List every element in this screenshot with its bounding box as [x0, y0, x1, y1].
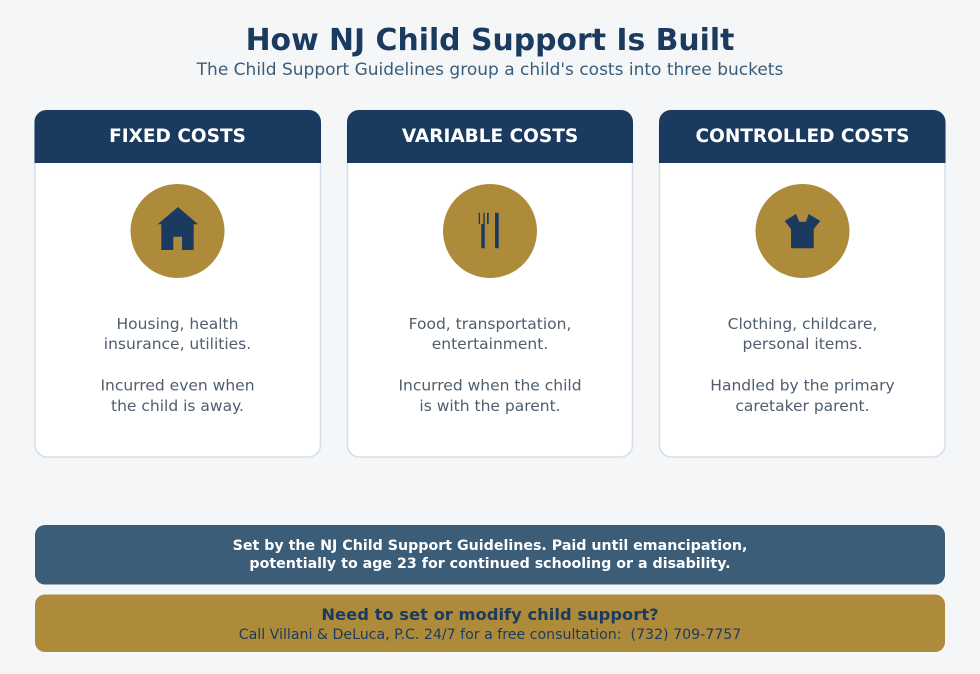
- title: How NJ Child Support Is Built: [246, 23, 734, 58]
- banner: guidelines note: Set by the NJ Child Support Guidelines. Paid until emancipation,: [233, 538, 747, 554]
- card background: [348, 110, 632, 457]
- card heading: FIXED COSTS: [109, 126, 246, 147]
- icon: house: [130, 184, 224, 278]
- card text: insurance, utilities.: [104, 335, 251, 353]
- banner: call to action: Call Villani & DeLuca, P.C. 24/7 for a free consultation: (732) 709-7757: [239, 627, 741, 643]
- card text: Incurred when the child: [398, 376, 582, 394]
- card text: Incurred even when: [100, 376, 255, 394]
- card text: entertainment.: [432, 335, 548, 353]
- panel: fixed costs: [34, 110, 321, 457]
- card text: the child is away.: [111, 397, 244, 415]
- banner: guidelines note: potentially to age 23 for continued schooling or a disability.: [249, 556, 731, 572]
- panel: variable costs: [347, 110, 633, 457]
- icon: shirt: [756, 184, 850, 278]
- icon: fork and knife: [443, 184, 537, 278]
- card text: Housing, health: [117, 315, 238, 333]
- card text: is with the parent.: [419, 397, 561, 415]
- subtitle: The Child Support Guidelines group a child's costs into three buckets: [196, 60, 783, 80]
- card header: [347, 110, 633, 163]
- card header: [659, 110, 946, 163]
- banner: guidelines note: [35, 525, 945, 584]
- card header: [34, 110, 321, 163]
- banner: call to action: [35, 594, 945, 652]
- banner: call to action: Need to set or modify child support?: [321, 605, 659, 624]
- card heading: CONTROLLED COSTS: [696, 126, 909, 147]
- card text: Handled by the primary: [710, 376, 895, 394]
- card text: caretaker parent.: [735, 397, 870, 415]
- card heading: VARIABLE COSTS: [402, 126, 578, 147]
- panel: controlled costs: [659, 110, 946, 457]
- card background: [35, 110, 320, 457]
- card background: [660, 110, 945, 457]
- card text: Food, transportation,: [409, 315, 571, 333]
- card text: personal items.: [743, 335, 862, 353]
- card text: Clothing, childcare,: [728, 315, 877, 333]
